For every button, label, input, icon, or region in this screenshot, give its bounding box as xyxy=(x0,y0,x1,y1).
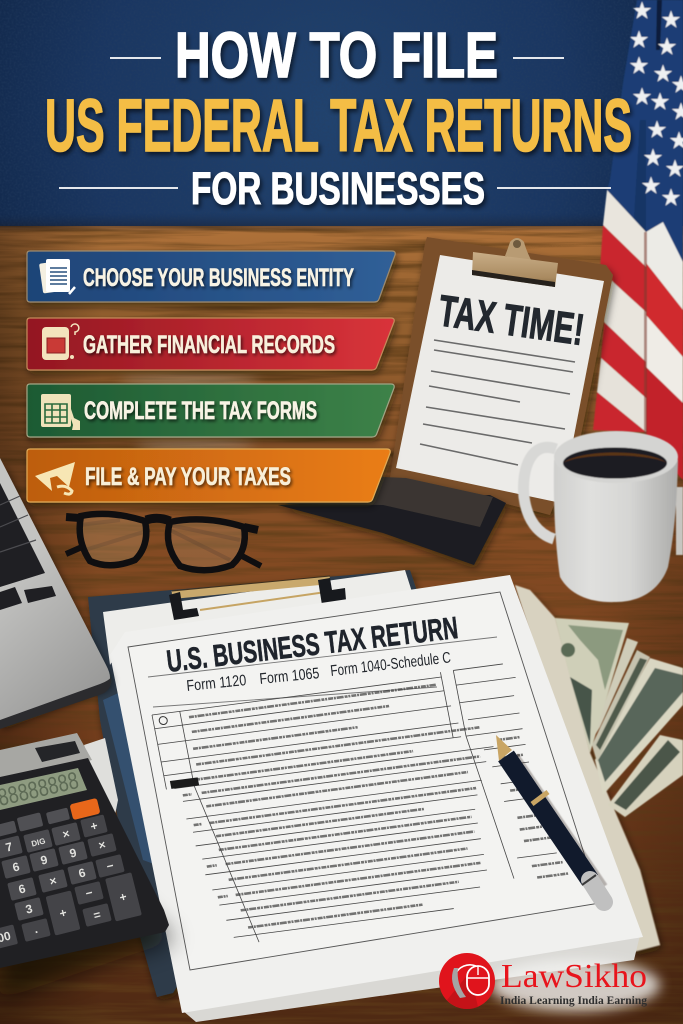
form codes: Form 1120 xyxy=(186,672,247,695)
form inner border xyxy=(128,592,600,970)
mug handles xyxy=(524,447,556,539)
laptop keyboard xyxy=(0,483,56,610)
coffee xyxy=(563,448,667,478)
under sheet xyxy=(84,738,118,830)
banner: gather financial records xyxy=(27,318,394,370)
icon: paper plane xyxy=(35,462,75,494)
calculator keys: − xyxy=(84,885,94,901)
icon: records box xyxy=(42,324,79,360)
title: line 3: FOR BUSINESSES xyxy=(191,163,485,214)
laptop body xyxy=(0,458,110,726)
gold clip bar xyxy=(169,576,346,620)
banner: complete the tax forms: COMPLETE THE TAX FORMS xyxy=(84,397,317,425)
title: line 1: HOW TO FILE xyxy=(175,19,498,91)
main form sheet xyxy=(110,575,643,1013)
flag: right fold stripes xyxy=(644,222,683,480)
American flag xyxy=(593,0,683,480)
left lens xyxy=(80,514,146,565)
calculator display xyxy=(0,768,87,810)
right lens xyxy=(168,519,245,570)
clipboard paper xyxy=(396,255,604,503)
logo wordmark: LawSikho xyxy=(501,958,647,995)
folder under papers xyxy=(88,570,420,997)
money fan xyxy=(515,585,683,952)
calculator keys: 6 xyxy=(11,859,21,875)
calculator top plate xyxy=(0,733,92,782)
back sheet xyxy=(103,570,412,665)
calculator keys: . xyxy=(32,922,39,936)
paper stack edge xyxy=(515,585,660,952)
icon: calendar form and hand xyxy=(41,394,80,430)
calculator keys: × xyxy=(48,873,58,889)
pen end cap xyxy=(590,880,604,902)
calculator keys: + xyxy=(89,818,99,834)
calculator body xyxy=(0,758,169,968)
calculator keys: 3 xyxy=(24,901,34,917)
pen ring xyxy=(532,792,548,804)
form codes xyxy=(186,649,452,695)
tax return papers on clipboard xyxy=(88,570,643,1022)
calculator keys: − xyxy=(105,858,115,874)
calculator keys: = xyxy=(92,907,102,923)
banner: gather financial records: GATHER FINANCIAL RECORDS xyxy=(83,331,335,359)
calculator keys: × xyxy=(61,826,71,842)
form title: U.S. BUSINESS TAX RETURN xyxy=(165,610,460,679)
banner: file and pay your taxes: FILE & PAY YOUR TAXES xyxy=(85,463,291,491)
calculator keys: × xyxy=(97,837,107,853)
laptop xyxy=(0,458,111,729)
eyeglasses xyxy=(66,514,261,570)
mug rim xyxy=(554,431,678,483)
flag: left fold stripes xyxy=(593,190,646,432)
LawSikho logo xyxy=(439,953,660,1011)
icon: documents xyxy=(39,259,75,294)
form codes: Form 1065 xyxy=(259,665,320,688)
calculator keys: + xyxy=(118,889,128,905)
header: navy band xyxy=(0,0,683,232)
title xyxy=(45,19,632,214)
logo tagline: India Learning India Earning xyxy=(500,995,647,1007)
logo mark xyxy=(439,953,495,1009)
pen tip xyxy=(496,735,512,761)
calculator keys: 7 xyxy=(4,839,14,855)
mug body xyxy=(554,460,678,602)
form codes: Form 1040-Schedule C xyxy=(330,649,452,680)
wallet xyxy=(278,477,506,565)
calculator keys: DIG xyxy=(30,836,46,849)
bills xyxy=(555,618,683,817)
banner: complete the tax forms xyxy=(27,384,394,437)
step banners xyxy=(27,251,395,502)
banner: file and pay your taxes xyxy=(27,449,390,502)
flag: stars canton xyxy=(607,0,683,265)
calculator keys: 6 xyxy=(17,881,27,897)
banner: choose your business entity xyxy=(27,251,395,302)
pen xyxy=(496,735,604,902)
clipboard: Tax Time xyxy=(390,237,613,515)
form table xyxy=(151,661,574,950)
background: wooden table xyxy=(0,225,683,1024)
calculator keys: 9 xyxy=(68,845,78,861)
calculator keys: 6 xyxy=(77,865,87,881)
calculator keys: + xyxy=(58,905,68,921)
coffee mug xyxy=(524,431,683,602)
pen barrel xyxy=(506,756,590,880)
heading: Tax Time: TAX TIME! xyxy=(436,286,587,355)
lower sheet xyxy=(182,935,640,1022)
clipboard board xyxy=(390,237,613,515)
banner: choose your business entity: CHOOSE YOUR BUSINESS ENTITY xyxy=(83,264,354,292)
calculator keys xyxy=(0,798,142,951)
clipboard metal clip xyxy=(472,238,558,287)
calculator xyxy=(0,733,175,1000)
calculator shadow xyxy=(0,800,175,1000)
calculator keys: 9 xyxy=(39,852,49,868)
